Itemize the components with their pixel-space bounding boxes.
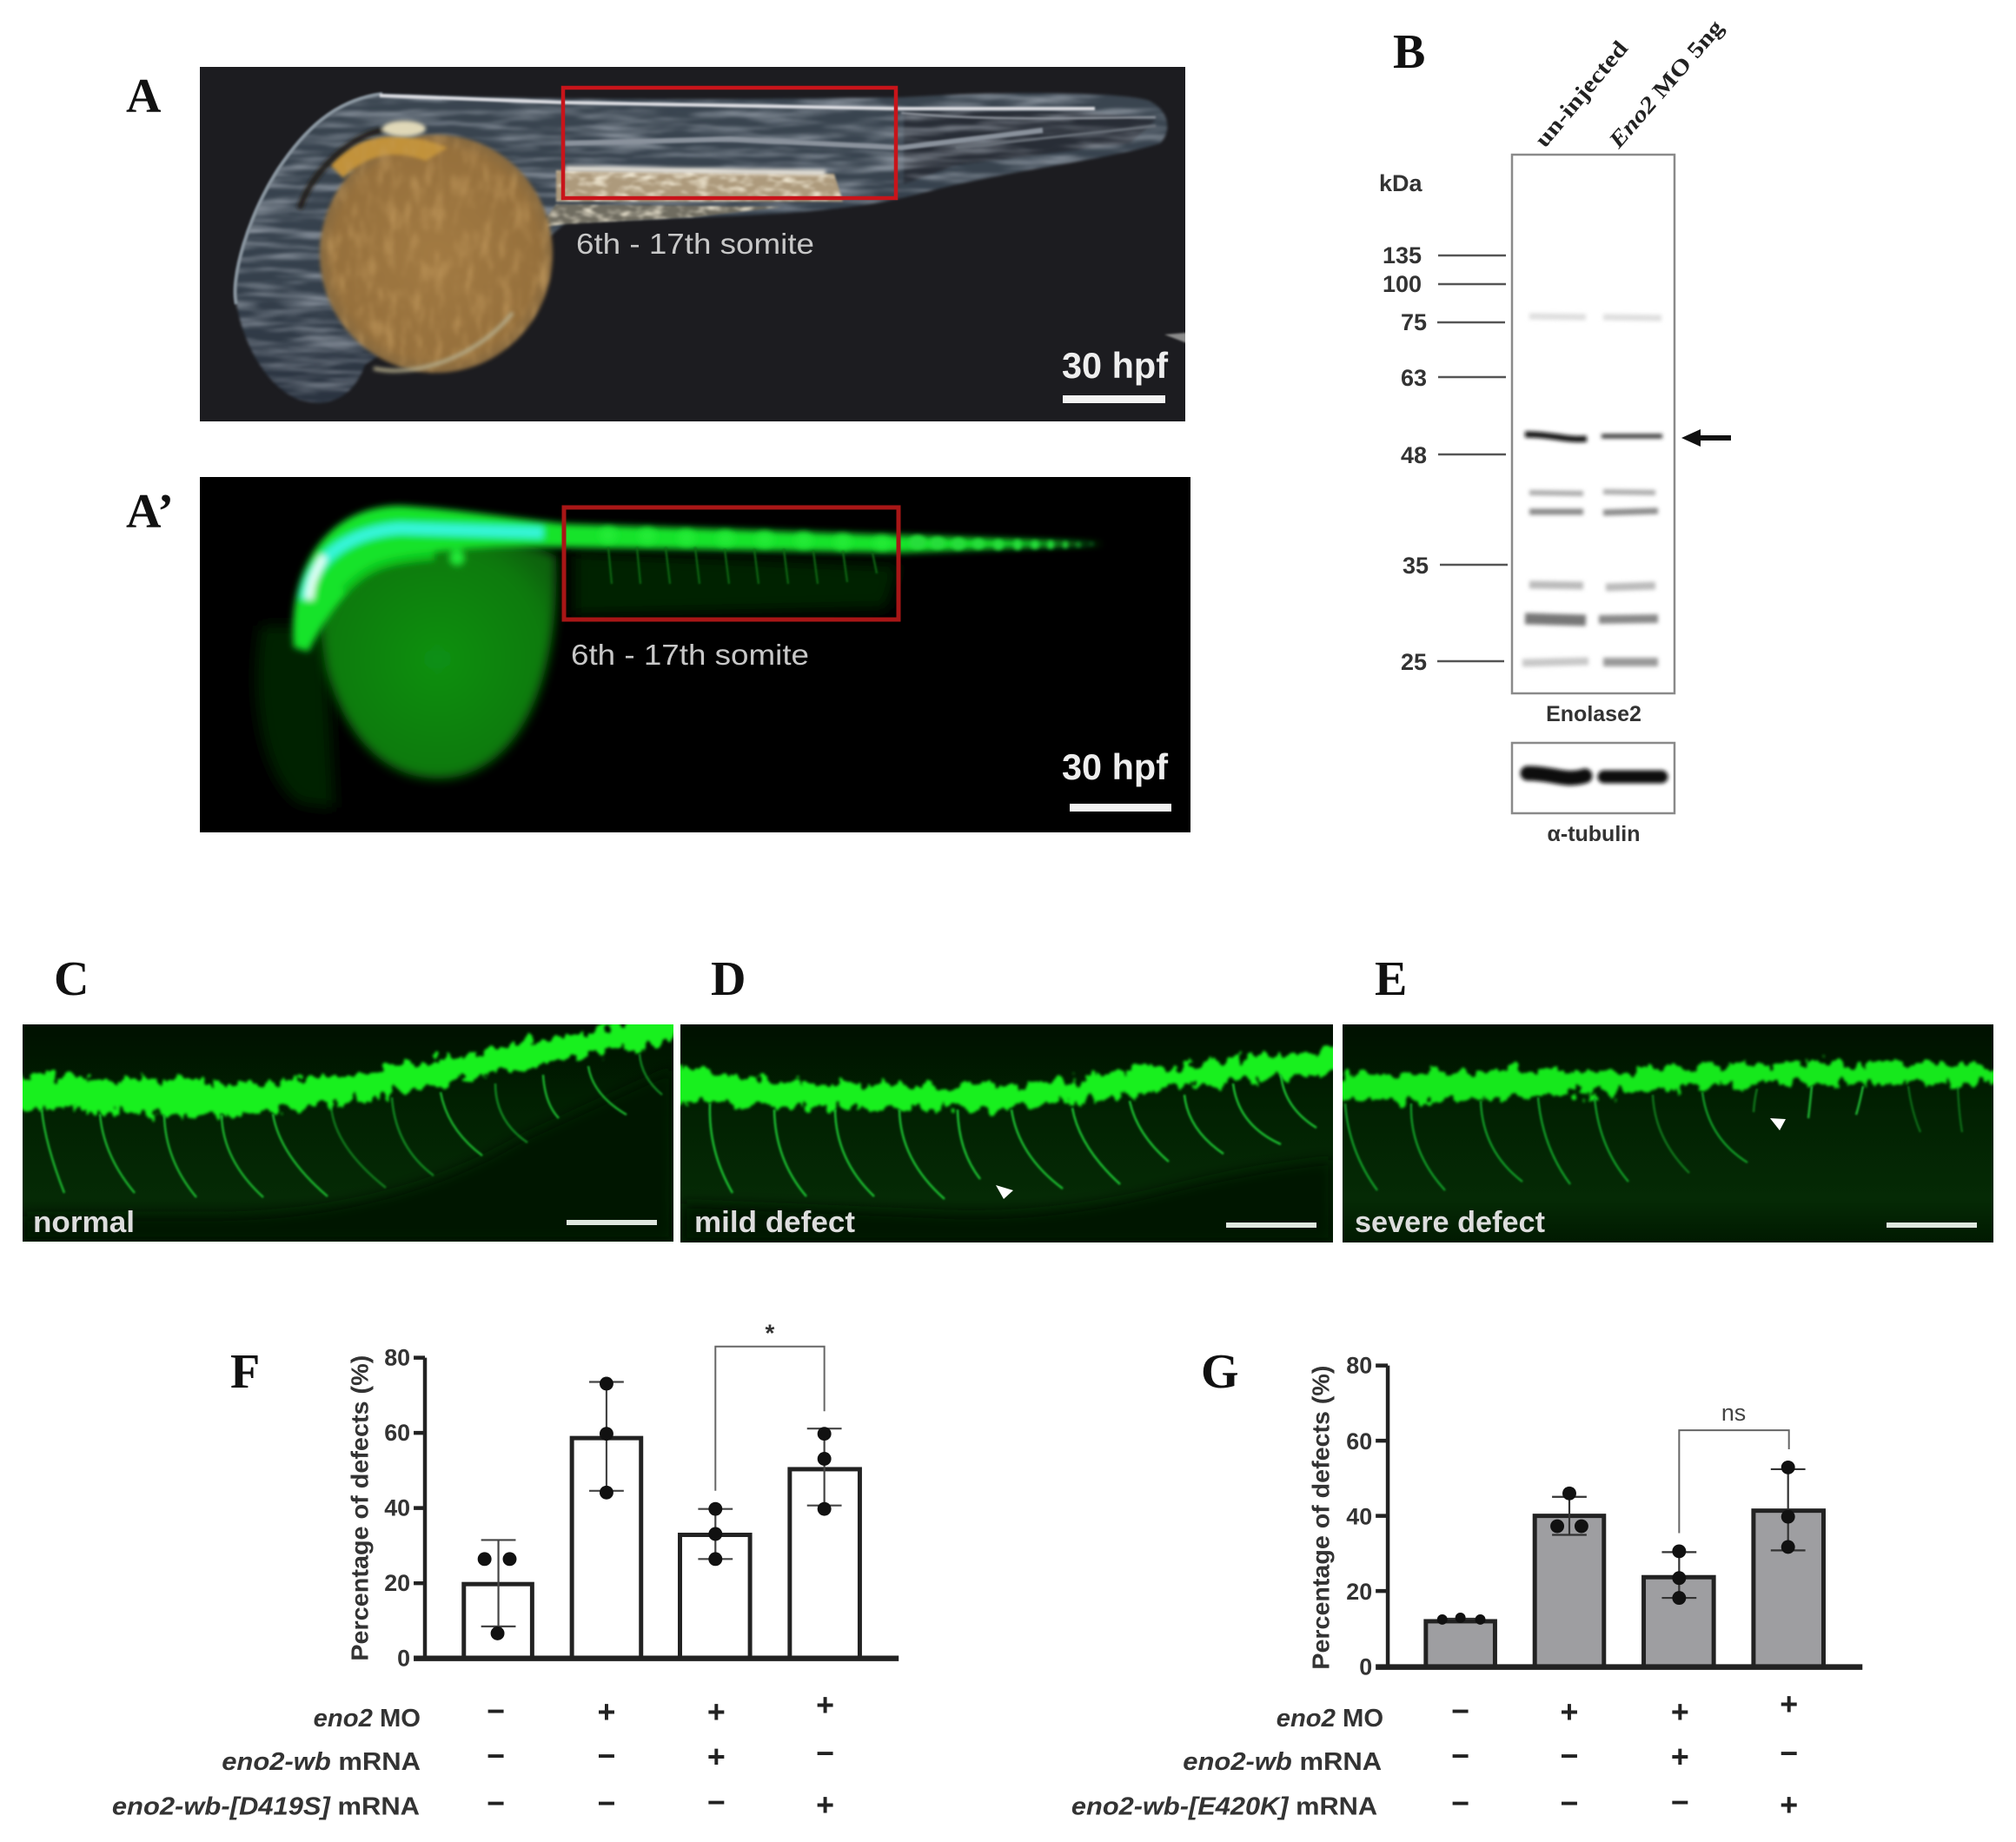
row labels: eno2-wb-[D419S] mRNA <box>112 1793 420 1821</box>
row labels: eno2-wb mRNA <box>1183 1748 1382 1776</box>
row labels <box>1071 1705 1383 1821</box>
stage label: 30 hpf <box>1062 746 1169 787</box>
panel label: A prime: A’ <box>126 485 174 539</box>
scale bar <box>1887 1222 1977 1228</box>
tubulin label: α-tubulin <box>1547 822 1641 846</box>
panel E: severe defect <box>1334 1024 2003 1242</box>
y axis ticks labels: 80 <box>1346 1353 1372 1379</box>
treatment matrix: + <box>1561 1694 1578 1729</box>
y axis ticks labels: 20 <box>1346 1579 1372 1605</box>
panel label: G: G <box>1201 1345 1239 1399</box>
condition label: normal <box>33 1206 135 1239</box>
motor nerves <box>42 1054 662 1197</box>
treatment matrix: − <box>487 1786 505 1821</box>
panel label: E: E <box>1375 952 1407 1006</box>
embryo body <box>235 93 1167 403</box>
treatment matrix: + <box>816 1788 834 1823</box>
row labels: eno2-wb mRNA <box>222 1748 421 1776</box>
lane label: Eno2 MO: Eno2 MO 5ng <box>1603 15 1728 154</box>
panel label: A: A <box>126 70 162 123</box>
yolk highlights <box>300 121 513 371</box>
treatment matrix <box>487 1687 834 1823</box>
y axis ticks labels: 60 <box>384 1420 410 1446</box>
size ladder: 35 <box>1403 553 1429 579</box>
condition label: mild defect <box>694 1206 855 1239</box>
treatment matrix: + <box>707 1739 726 1774</box>
bars <box>1426 1511 1823 1667</box>
scale bar <box>1063 395 1165 403</box>
bars <box>464 1438 859 1659</box>
treatment matrix: − <box>597 1786 615 1821</box>
error bars <box>481 1382 842 1627</box>
Enolase2 label: Enolase2 <box>1546 702 1641 726</box>
motor nerves <box>1345 1086 1962 1190</box>
lane label: un-injected: un-injected <box>1529 36 1633 152</box>
data points <box>1437 1461 1795 1625</box>
defect arrowhead <box>1770 1118 1786 1130</box>
row labels: eno2-wb-[E420K] mRNA <box>1071 1793 1377 1821</box>
red box <box>564 507 899 620</box>
kDa label: kDa <box>1379 170 1423 196</box>
panel C: normal <box>23 1024 673 1242</box>
tail spots <box>909 535 1094 550</box>
y axis ticks labels <box>384 1345 410 1672</box>
scale bar <box>567 1220 657 1225</box>
red box <box>563 88 896 198</box>
significance star: * <box>766 1320 775 1347</box>
size ladder: 25 <box>1401 649 1427 675</box>
treatment matrix: + <box>1671 1739 1689 1774</box>
somite text: 6th - 17th somite <box>571 639 809 671</box>
faint motor nerves <box>608 547 877 584</box>
significance bracket <box>715 1347 825 1491</box>
condition label: severe defect <box>1355 1206 1545 1239</box>
row labels: eno2 MO <box>314 1705 421 1733</box>
significance bracket <box>1679 1430 1789 1534</box>
tubulin bands <box>1528 773 1661 778</box>
treatment matrix: − <box>1451 1786 1469 1821</box>
loading control blot <box>1512 743 1674 813</box>
motor band <box>673 1050 1343 1110</box>
panel label: B: B <box>1393 25 1425 79</box>
y axis ticks labels: 40 <box>384 1495 410 1521</box>
axes <box>414 1655 899 1661</box>
treatment matrix: − <box>487 1739 505 1773</box>
y axis ticks labels <box>1346 1353 1372 1680</box>
blot bands <box>1522 316 1662 663</box>
row labels <box>112 1705 421 1821</box>
panel A: brightfield embryo <box>200 67 1187 421</box>
chart F: percentage of defects, D419S <box>112 1320 899 1823</box>
size ladder: 135 <box>1383 242 1422 268</box>
size ladder <box>1383 242 1429 675</box>
treatment matrix: + <box>1780 1788 1798 1823</box>
target arrow <box>1681 429 1731 447</box>
yolk glow <box>256 540 899 808</box>
scale bar <box>1226 1222 1316 1228</box>
data points <box>478 1377 832 1640</box>
motor band <box>23 1024 673 1123</box>
panel label: D: D <box>711 952 746 1006</box>
scale bar <box>1070 804 1171 812</box>
yolk ball <box>320 135 553 373</box>
y axis ticks labels: 40 <box>1346 1504 1372 1530</box>
y axis title: Percentage of defects (%) <box>1307 1366 1334 1670</box>
y axis ticks labels: 0 <box>397 1646 410 1672</box>
defect arrowhead <box>996 1185 1013 1199</box>
panel A prime: fluorescent embryo <box>200 477 1190 832</box>
stage label: 30 hpf <box>1062 345 1169 386</box>
treatment matrix: − <box>816 1736 834 1771</box>
significance label: ns <box>1721 1400 1746 1426</box>
treatment matrix: − <box>1451 1739 1469 1773</box>
gut tube <box>539 170 843 228</box>
size ladder: 75 <box>1401 309 1427 335</box>
panel B: western blot <box>1379 15 1731 846</box>
smudge <box>1164 333 1187 343</box>
y axis ticks labels: 80 <box>384 1345 410 1371</box>
band lumps <box>600 527 891 550</box>
treatment matrix: − <box>1561 1786 1578 1821</box>
y axis ticks labels: 0 <box>1359 1654 1372 1680</box>
somite text: 6th - 17th somite <box>576 228 814 260</box>
y axis ticks labels: 20 <box>384 1570 410 1596</box>
axes <box>1376 1664 1862 1670</box>
treatment matrix: − <box>1561 1739 1578 1773</box>
treatment matrix: − <box>1780 1736 1798 1771</box>
panel label: C: C <box>54 952 89 1006</box>
y axis ticks labels: 60 <box>1346 1428 1372 1454</box>
motor band <box>1334 1061 2003 1103</box>
size ladder: 63 <box>1401 365 1427 391</box>
treatment matrix: − <box>1671 1786 1689 1820</box>
motor nerves <box>710 1075 1316 1199</box>
treatment matrix: − <box>597 1739 615 1773</box>
chart G: percentage of defects, E420K <box>1071 1353 1862 1823</box>
body streaks <box>235 94 1156 304</box>
treatment matrix: + <box>1671 1694 1689 1729</box>
panel label: F: F <box>230 1345 260 1399</box>
treatment matrix: + <box>707 1694 726 1729</box>
size ladder: 100 <box>1383 271 1422 297</box>
error bars <box>1443 1469 1806 1619</box>
treatment matrix: + <box>816 1687 834 1722</box>
treatment matrix: − <box>487 1693 505 1728</box>
treatment matrix: + <box>597 1694 615 1729</box>
treatment matrix: − <box>707 1786 726 1820</box>
row labels: eno2 MO <box>1277 1705 1383 1733</box>
size ladder: 48 <box>1401 442 1427 468</box>
treatment matrix <box>1451 1686 1798 1823</box>
treatment matrix: − <box>1451 1693 1469 1728</box>
panel D: mild defect <box>673 1024 1343 1242</box>
ladder ticks <box>1437 255 1508 661</box>
y axis title: Percentage of defects (%) <box>346 1355 373 1661</box>
treatment matrix: + <box>1780 1686 1798 1721</box>
blot membrane <box>1512 155 1674 693</box>
bright neural band <box>293 506 1104 652</box>
